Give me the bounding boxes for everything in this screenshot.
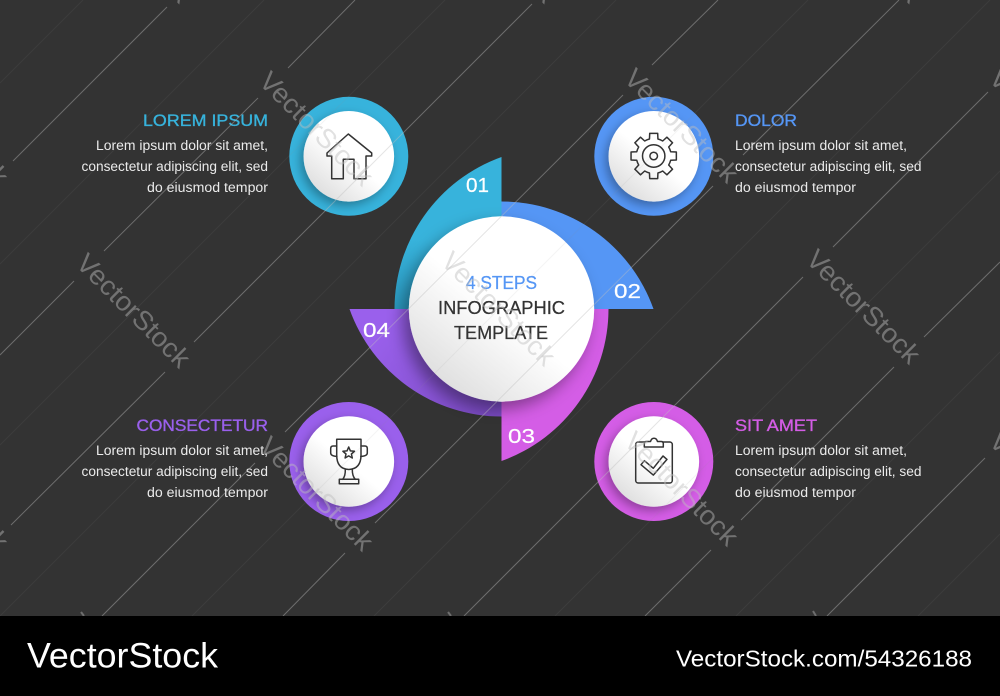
watermark: VectorStock: [70, 248, 197, 374]
number 04: 04: [363, 320, 390, 342]
text block 4: consectetur adipiscing elit, sed: [82, 464, 268, 479]
center heading: 4 STEPS: [466, 273, 537, 293]
text block 1: Lorem ipsum dolor sit amet,: [96, 138, 268, 153]
icon: clipboard: [636, 438, 672, 483]
ring 3: [594, 402, 713, 521]
icon: trophy: [331, 439, 367, 484]
text block 1: [82, 138, 269, 195]
icon: house: [327, 134, 372, 179]
footer url: VectorStock.com/54326188: [676, 646, 972, 672]
watermark: VectorStock: [435, 246, 562, 372]
watermark: VectorStock: [618, 63, 745, 189]
blade 04: [350, 309, 502, 416]
text block 2: consectetur adipiscing elit, sed: [735, 159, 922, 174]
panel: step 1: [82, 97, 408, 216]
panel: step 3: [594, 402, 922, 521]
disc 1: [304, 111, 394, 202]
center heading: [438, 273, 565, 343]
text block 3: consectetur adipiscing elit, sed: [735, 464, 922, 479]
number 02: 02: [614, 281, 641, 303]
text block 2: [735, 138, 922, 195]
watermark: VectorStock: [618, 426, 745, 552]
text block 3: do eiusmod tempor: [735, 485, 857, 500]
text block 1: do eiusmod tempor: [147, 180, 269, 195]
blade 03: [502, 309, 608, 461]
text block 4: [82, 443, 269, 500]
blade 01: [394, 157, 502, 309]
heading: sit amet: SIT AMET: [735, 416, 817, 435]
center circle: [409, 216, 594, 402]
text block 3: Lorem ipsum dolor sit amet,: [735, 443, 907, 458]
center heading: TEMPLATE: [454, 323, 548, 343]
ring 4: [289, 402, 408, 521]
text block 2: do eiusmod tempor: [735, 180, 857, 195]
disc 2: [608, 111, 699, 202]
number 01: 01: [466, 175, 489, 197]
footer logo: VectorStock: [27, 637, 219, 676]
text block 1: consectetur adipiscing elit, sed: [82, 159, 268, 174]
disc 3: [608, 416, 699, 507]
number 03: 03: [508, 426, 535, 448]
ring 1: [289, 97, 408, 216]
watermark: VectorStock: [253, 66, 380, 192]
ring 2: [594, 97, 713, 216]
center heading: INFOGRAPHIC: [438, 298, 565, 318]
disc 4: [304, 416, 394, 507]
text block 4: do eiusmod tempor: [147, 485, 269, 500]
heading: consectetur: CONSECTETUR: [136, 416, 268, 435]
blade 02: [502, 202, 654, 309]
watermark: VectorStock: [800, 244, 927, 370]
heading: dolor: DOLOR: [735, 111, 797, 130]
text block 4: Lorem ipsum dolor sit amet,: [96, 443, 268, 458]
panel: step 2: [594, 97, 922, 216]
panel: central diagram: [350, 157, 654, 461]
watermark: VectorStock: [253, 431, 380, 557]
text block 3: [735, 443, 922, 500]
heading: lorem ipsum: LOREM IPSUM: [143, 111, 268, 130]
icon: gear: [631, 133, 676, 179]
text block 2: Lorem ipsum dolor sit amet,: [735, 138, 907, 153]
panel: step 4: [82, 402, 408, 521]
footer bar: [0, 616, 1000, 696]
